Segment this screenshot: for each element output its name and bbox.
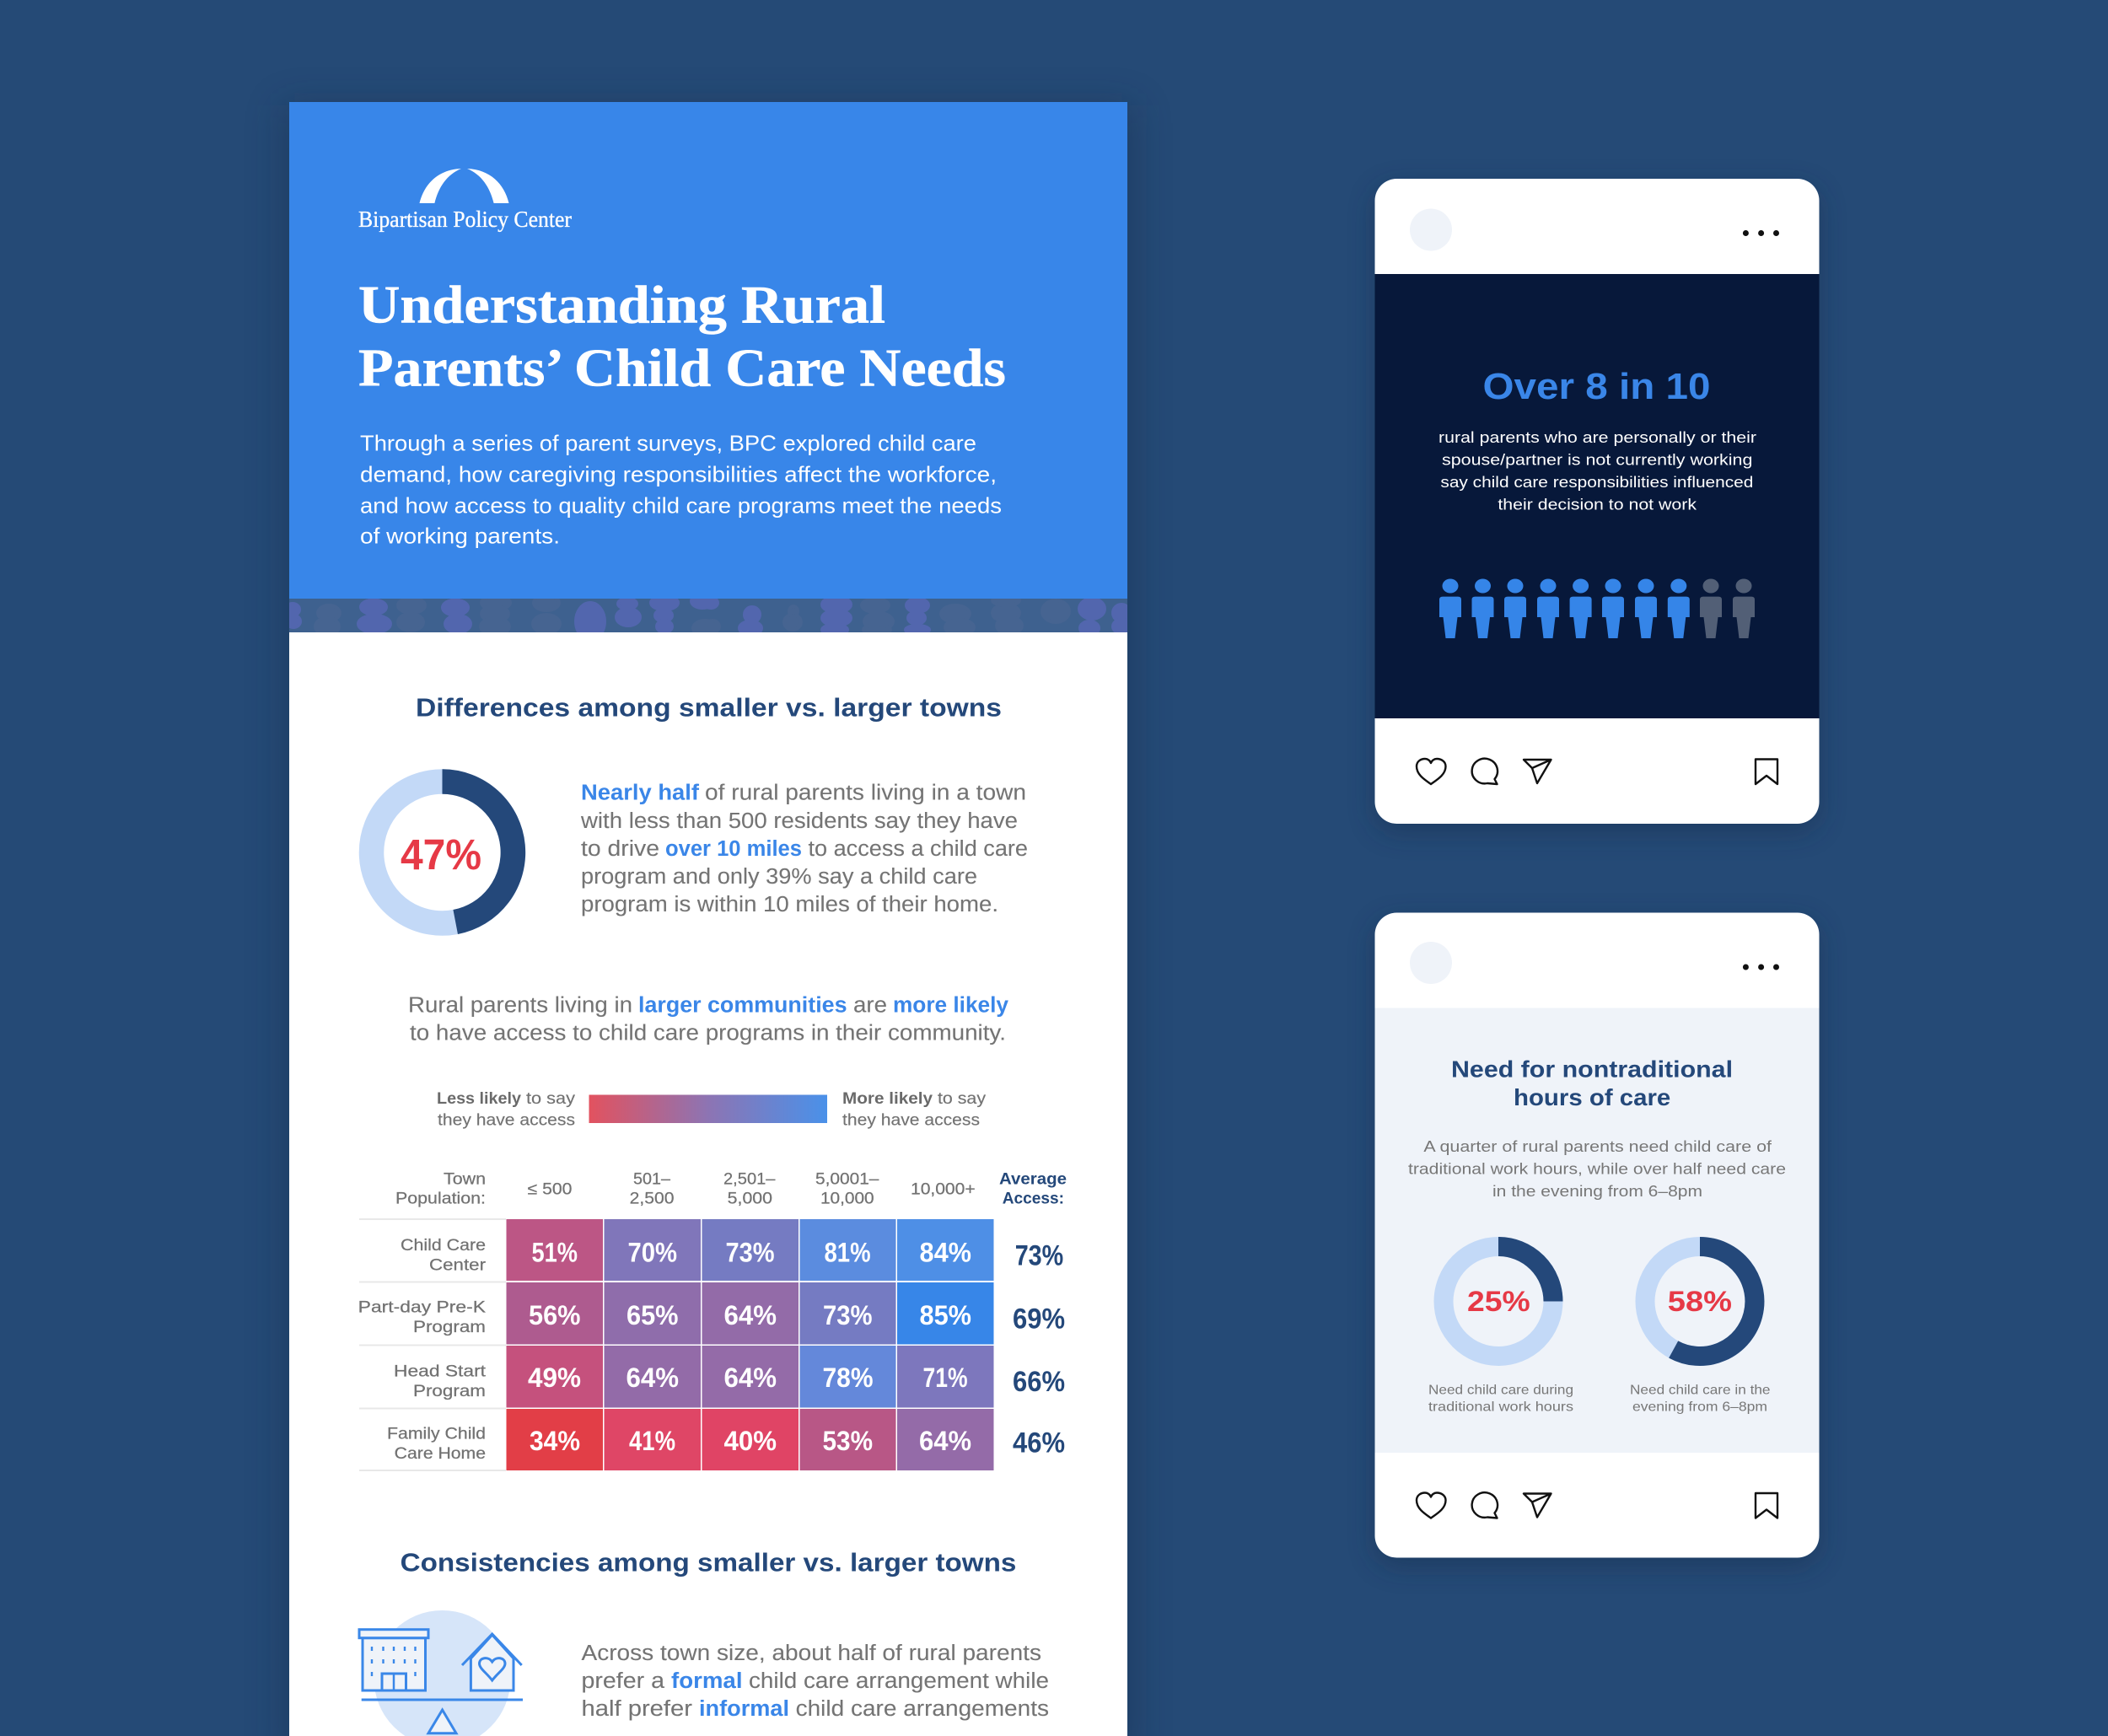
row: Family Child Care Home (387, 1409, 1065, 1470)
stat description: their decision to not work (1498, 497, 1697, 513)
legend: likelihood gradient: they have access (842, 1111, 980, 1130)
row: Part-day Pre-K Program: 85% (919, 1300, 971, 1330)
title (358, 275, 1006, 398)
stat description: spouse/partner is not currently working (1442, 452, 1752, 469)
legend: likelihood gradient: to say (526, 1089, 575, 1108)
row: Head Start Program (394, 1346, 1065, 1408)
row: Head Start Program: 66% (1013, 1366, 1065, 1398)
text block: formal vs informal: child care arrangements (796, 1697, 1049, 1721)
table header: ≤ 500 (528, 1180, 573, 1199)
text block: formal vs informal: half prefer (582, 1697, 693, 1721)
text block: formal vs informal: Across town size, about half of rural parents (582, 1642, 1041, 1665)
stat description: say child care responsibilities influenced (1440, 474, 1753, 491)
decorative band of people (289, 599, 1127, 632)
table header: 5,000 (728, 1190, 772, 1208)
row: Family Child Care Home: Care Home (395, 1444, 486, 1463)
row: Child Care Center: Child Care (401, 1236, 486, 1255)
table header: 2,500 (630, 1190, 675, 1208)
legend: likelihood gradient: they have access (438, 1111, 575, 1130)
table header: 501– (633, 1169, 670, 1188)
pictogram: 8 of 10 people (1439, 578, 1755, 638)
text block: nearly half: program is within 10 miles of their home. (581, 893, 998, 916)
text block: nearly half: of rural parents living in a town (705, 781, 1026, 804)
title: Parents’ Child Care Needs (358, 339, 1006, 398)
card description: traditional work hours, while over half need care (1408, 1160, 1786, 1177)
donut chart: 47% (371, 782, 513, 923)
text block: nearly half: to drive (581, 837, 659, 861)
heading: differences: Differences among smaller vs. larger towns (416, 693, 1002, 722)
table header: 10,000 (820, 1190, 874, 1208)
legend: likelihood gradient (437, 1089, 986, 1130)
icon: balance of building and home (359, 1610, 523, 1736)
row: Head Start Program: Program (413, 1382, 486, 1400)
text block: larger communities: larger communities (638, 993, 847, 1017)
stat heading: Over 8 in 10 (1482, 366, 1710, 407)
text block: formal vs informal (582, 1642, 1049, 1721)
row: Part-day Pre-K Program: 56% (529, 1300, 580, 1330)
row: Family Child Care Home: 46% (1013, 1427, 1065, 1459)
stat description: rural parents who are personally or their (1438, 429, 1756, 446)
card heading (1451, 1056, 1733, 1110)
text block: nearly half: program and only 39% say a child care (581, 865, 977, 889)
intro text: Through a series of parent surveys, BPC explored child care (360, 430, 976, 455)
row: Part-day Pre-K Program: Program (413, 1318, 486, 1336)
row: Child Care Center: 51% (531, 1238, 578, 1268)
panel: social card nontraditional hours (1374, 912, 1820, 1567)
panel: blue header (289, 102, 1127, 599)
row: Part-day Pre-K Program: 65% (626, 1300, 678, 1330)
legend: likelihood gradient: to say (938, 1089, 986, 1108)
table header: Population: (395, 1190, 486, 1208)
intro text: and how access to quality child care programs meet the needs (360, 492, 1002, 518)
text block: larger communities: are (853, 993, 887, 1017)
row: Family Child Care Home: 53% (823, 1426, 873, 1456)
caption: evening hours (1630, 1383, 1771, 1415)
caption: traditional hours: Need child care during (1428, 1383, 1573, 1397)
table header (395, 1169, 1067, 1208)
row: Head Start Program: 64% (723, 1362, 777, 1393)
row: Family Child Care Home: 64% (919, 1426, 971, 1456)
table header: Access: (1003, 1190, 1064, 1208)
text block: larger communities: more likely (893, 993, 1009, 1017)
panel: infographic page (282, 102, 1134, 1736)
text block: formal vs informal: prefer a (582, 1669, 665, 1693)
intro text (360, 430, 1002, 548)
text block: larger communities (408, 993, 1009, 1045)
text block: nearly half (580, 781, 1028, 916)
row: Head Start Program: Head Start (394, 1362, 487, 1381)
row: Part-day Pre-K Program: 64% (723, 1300, 777, 1330)
logo: Bipartisan Policy Center: Bipartisan Policy Center (358, 207, 572, 232)
row: Head Start Program: 64% (626, 1362, 679, 1393)
text block: larger communities: to have access to child care programs in their community. (410, 1022, 1006, 1045)
donut chart: 47%: 47% (401, 830, 481, 879)
table header: Average (999, 1169, 1067, 1188)
panel: social card over 8 in 10 (1374, 179, 1820, 832)
table header: 5,0001– (815, 1169, 879, 1188)
row: Head Start Program: 71% (922, 1362, 968, 1393)
card description: in the evening from 6–8pm (1492, 1183, 1702, 1200)
stat description (1438, 429, 1756, 513)
icons: post actions (1417, 1492, 1777, 1518)
table header: 2,501– (723, 1169, 776, 1188)
logo: Bipartisan Policy Center (358, 169, 572, 232)
icon: menu dots (1743, 965, 1779, 970)
title: Understanding Rural (358, 275, 885, 334)
row: Child Care Center: 70% (627, 1238, 677, 1268)
donut chart: 25% (1444, 1246, 1553, 1356)
row: Child Care Center: 73% (1015, 1240, 1063, 1272)
row: Part-day Pre-K Program: Part-day Pre-K (358, 1298, 486, 1317)
caption: evening hours: evening from 6–8pm (1632, 1400, 1767, 1415)
row: Child Care Center: Center (429, 1256, 487, 1275)
caption: traditional hours: traditional work hours (1428, 1400, 1573, 1415)
row: Child Care Center: 81% (825, 1238, 870, 1268)
text block: nearly half: over 10 miles (665, 837, 802, 861)
card heading: Need for nontraditional (1451, 1056, 1733, 1083)
row: Child Care Center (401, 1219, 1063, 1281)
text block: nearly half: to access a child care (808, 837, 1028, 861)
row: Family Child Care Home: Family Child (387, 1425, 486, 1443)
text block: nearly half: Nearly half (581, 781, 700, 804)
donut chart: 58% (1645, 1246, 1755, 1356)
row: Head Start Program: 78% (823, 1362, 874, 1393)
icon: menu dots (1743, 230, 1779, 236)
heading: consistencies: Consistencies among smaller vs. larger towns (401, 1548, 1016, 1577)
table: access heat map (358, 1169, 1067, 1470)
row: Part-day Pre-K Program (358, 1282, 1065, 1344)
intro text: demand, how caregiving responsibilities affect the workforce, (360, 462, 997, 487)
donut chart: 25%: 25% (1467, 1286, 1530, 1318)
text block: formal vs informal: informal (699, 1697, 789, 1721)
avatar (1410, 209, 1452, 251)
card heading: hours of care (1514, 1084, 1670, 1110)
row: Family Child Care Home: 41% (629, 1426, 675, 1456)
text block: larger communities: Rural parents living in (408, 993, 632, 1017)
card description (1408, 1138, 1786, 1200)
caption: evening hours: Need child care in the (1630, 1383, 1771, 1397)
card description: A quarter of rural parents need child care of (1423, 1138, 1772, 1155)
row: Family Child Care Home: 34% (530, 1426, 580, 1456)
row: Family Child Care Home: 40% (723, 1426, 777, 1456)
row: Head Start Program: 49% (528, 1362, 581, 1393)
table header: Town (444, 1169, 486, 1188)
donut chart: 58%: 58% (1668, 1286, 1732, 1318)
text block: nearly half: with less than 500 residents say they have (580, 809, 1018, 833)
text block: formal vs informal: child care arrangement while (749, 1669, 1049, 1693)
legend: likelihood gradient: More likely (842, 1089, 933, 1108)
row: Child Care Center: 73% (725, 1238, 774, 1268)
icons: post actions (1417, 759, 1777, 784)
intro text: of working parents. (360, 523, 560, 548)
row: Part-day Pre-K Program: 73% (823, 1300, 872, 1330)
caption: traditional hours (1428, 1383, 1573, 1415)
avatar (1410, 942, 1452, 984)
row: Child Care Center: 84% (919, 1238, 971, 1268)
legend: likelihood gradient: Less likely (437, 1089, 521, 1108)
row: Part-day Pre-K Program: 69% (1013, 1303, 1065, 1336)
table header: 10,000+ (911, 1180, 976, 1199)
text block: formal vs informal: formal (671, 1669, 742, 1693)
